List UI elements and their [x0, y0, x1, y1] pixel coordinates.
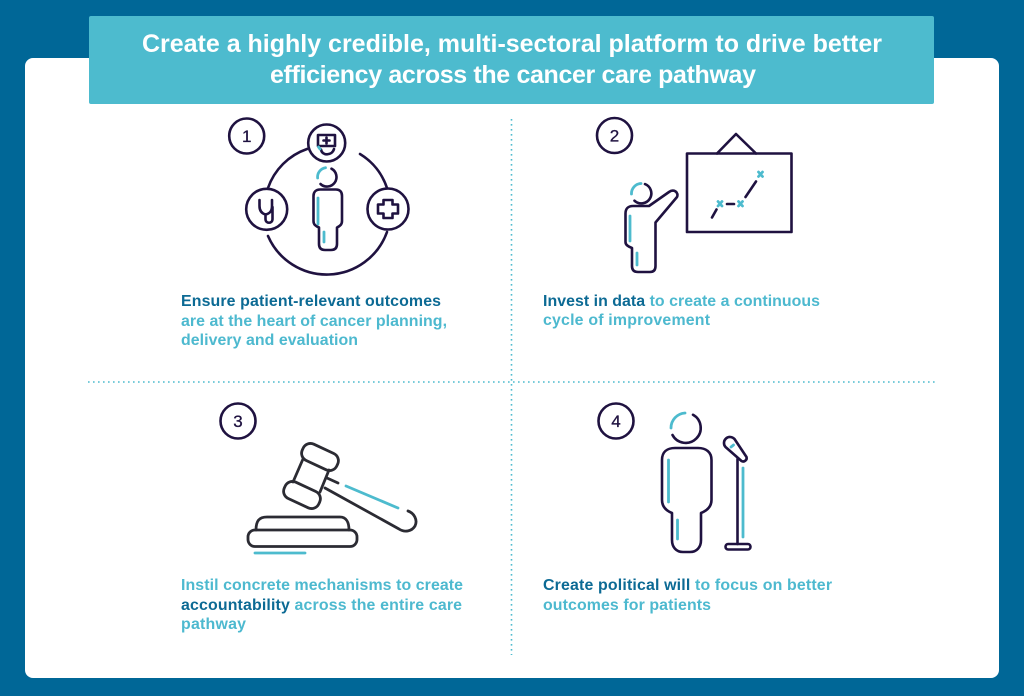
title: Create a highly credible, multi-sectoral platform to drive better [142, 30, 882, 58]
number badge 1: 1 [242, 127, 251, 146]
title banner [89, 16, 934, 104]
text: item 1: Ensure patient-relevant outcomes [181, 293, 441, 310]
icon: presenter at chart board [626, 134, 792, 272]
icon: speaker at microphone [662, 413, 750, 552]
panel: item 1 [181, 118, 447, 349]
icon: gavel [248, 441, 416, 553]
text: item 1 [181, 293, 447, 349]
text: item 1: are at the heart of cancer planning, [181, 313, 447, 330]
number badge 4: 4 [611, 412, 621, 431]
number badge 2 [597, 118, 632, 153]
panel: item 4 [543, 404, 832, 614]
number badge 1 [229, 118, 264, 154]
panel: item 2 [543, 118, 820, 329]
title [142, 30, 882, 89]
icon: patient surrounded by care [246, 124, 408, 275]
text: item 2 [543, 293, 820, 329]
number badge 3 [220, 404, 256, 438]
panel: item 3 [181, 404, 463, 633]
text: item 3: pathway [181, 616, 246, 633]
text: item 1: delivery and evaluation [181, 332, 358, 349]
number badge 3: 3 [233, 412, 243, 431]
text: item 2: cycle of improvement [543, 312, 711, 329]
text: item 4: Create political will to focus on better [543, 577, 832, 594]
text: item 2: Invest in data to create a continuous [543, 293, 820, 310]
text: item 3: Instil concrete mechanisms to create [181, 577, 463, 594]
text: item 3 [181, 577, 463, 633]
number badge 2: 2 [610, 126, 619, 146]
title: efficiency across the cancer care pathway [270, 61, 756, 89]
text: item 4 [543, 577, 832, 614]
number badge 4 [598, 404, 634, 438]
text: item 3: accountability across the entire care [181, 597, 462, 614]
text: item 4: outcomes for patients [543, 597, 711, 614]
